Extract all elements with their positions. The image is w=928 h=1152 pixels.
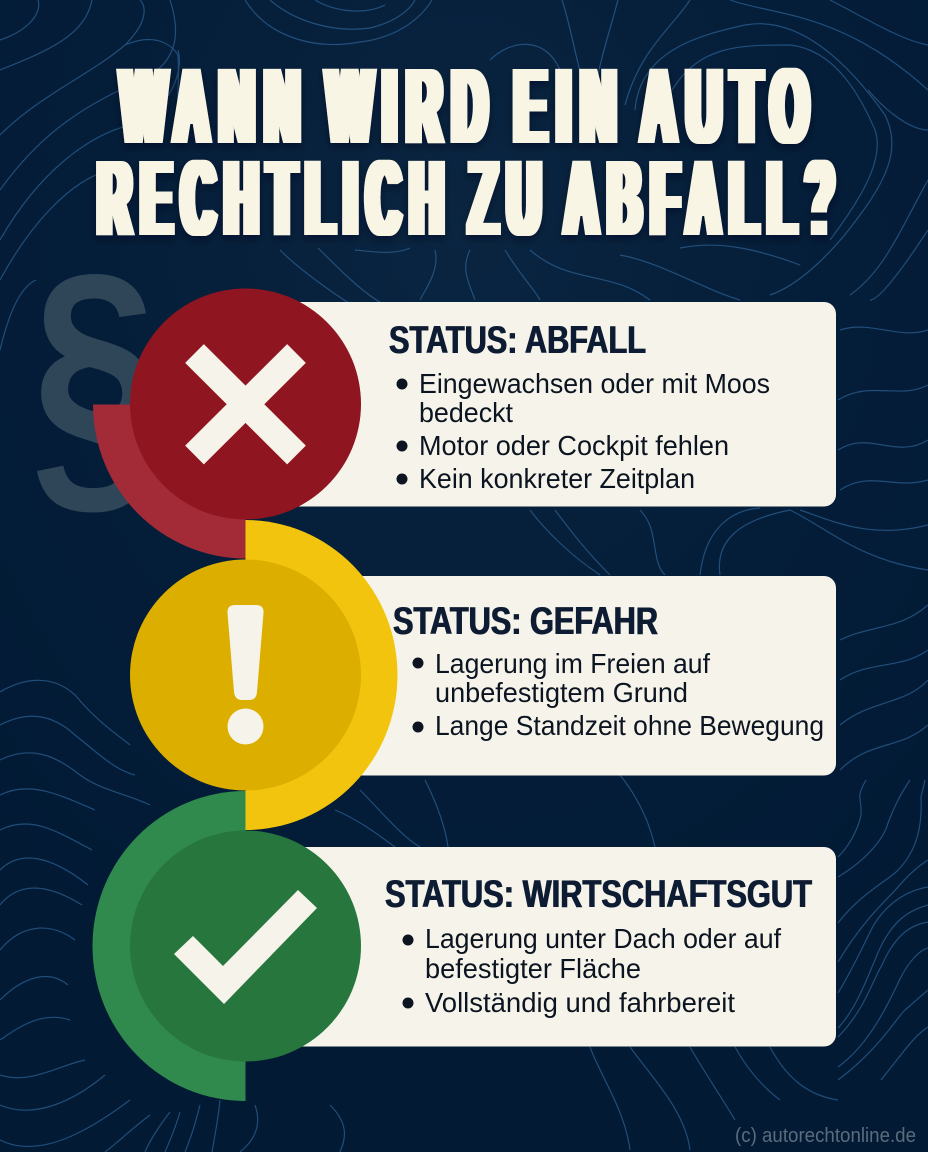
panel: status Wirtschaftsgut	[280, 847, 836, 1046]
list: Gefahr criteria: Lagerung im Freien auf	[435, 648, 710, 679]
card background	[280, 302, 836, 506]
heading: Abfall: STATUS: ABFALL	[389, 319, 646, 362]
card background	[280, 847, 836, 1046]
icon: green circle with check mark	[130, 830, 361, 1062]
list: Gefahr criteria: unbefestigtem Grund	[435, 677, 688, 708]
list: Abfall criteria: Eingewachsen oder mit Moos	[419, 368, 770, 399]
list: Abfall criteria: Kein konkreter Zeitplan	[419, 463, 695, 494]
heading: Gefahr: STATUS: GEFAHR	[393, 600, 658, 643]
panel: status Abfall	[280, 302, 836, 506]
list: Wirtschaftsgut criteria	[402, 923, 781, 1018]
icon: red ring segment	[93, 404, 246, 558]
title	[98, 45, 844, 258]
list: Wirtschaftsgut criteria: befestigter Fläche	[425, 953, 641, 984]
list: Abfall criteria	[396, 368, 770, 494]
list: Gefahr criteria: Lange Standzeit ohne Bewegung	[435, 710, 824, 741]
card background	[340, 576, 836, 776]
list: Abfall criteria: bedeckt	[419, 397, 513, 428]
panel: status Gefahr	[340, 576, 836, 776]
list: Wirtschaftsgut criteria: Vollständig und fahrbereit	[425, 987, 735, 1018]
icon: yellow circle with exclamation mark	[130, 560, 361, 790]
list: Gefahr criteria	[412, 648, 824, 741]
icon: paragraph symbol: §	[31, 212, 158, 542]
icon: green ring segment	[92, 791, 246, 1101]
list: Wirtschaftsgut criteria: Lagerung unter Dach oder auf	[425, 923, 781, 954]
icon: red circle with X	[130, 288, 361, 520]
footer: copyright: (c) autorechtonline.de	[735, 1125, 916, 1147]
heading: Wirtschaftsgut: STATUS: WIRTSCHAFTSGUT	[385, 873, 812, 916]
icon: yellow ring segment	[246, 520, 398, 830]
list: Abfall criteria: Motor oder Cockpit fehlen	[419, 430, 729, 461]
